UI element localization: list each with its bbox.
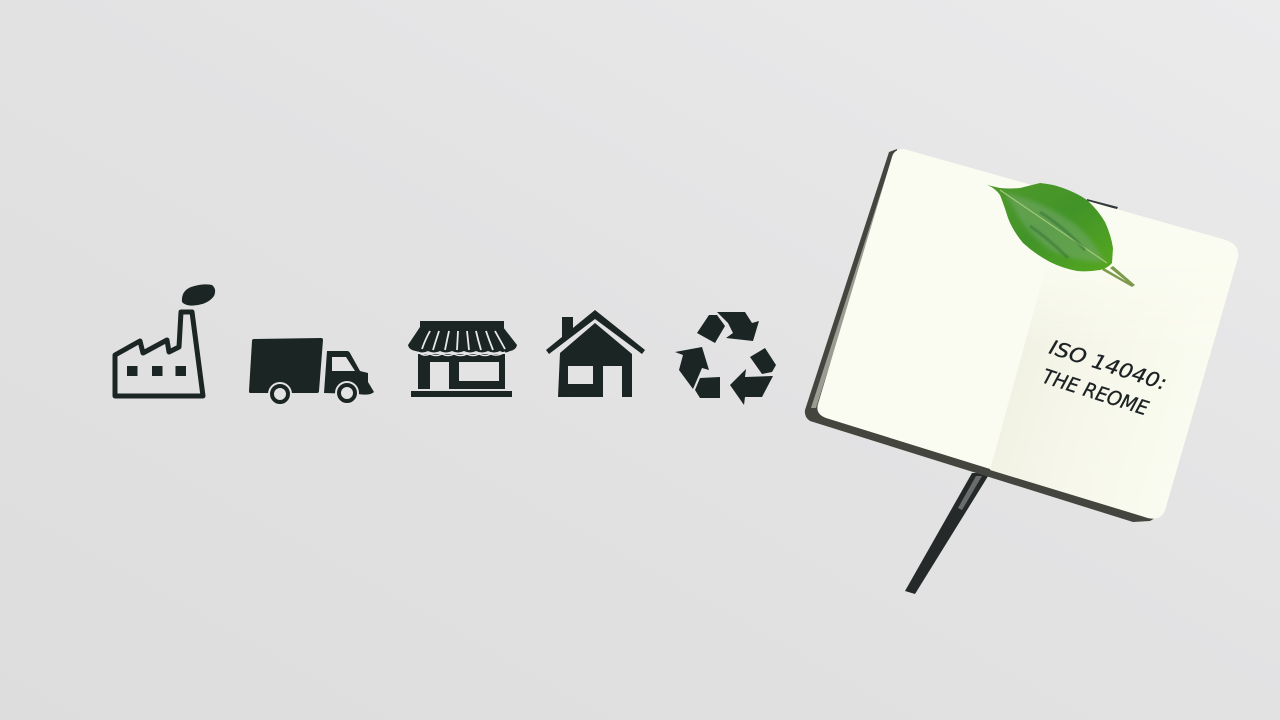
icon: delivery truck	[249, 338, 374, 406]
bookmark tip	[1087, 199, 1118, 209]
ribbon bookmark	[905, 473, 990, 594]
cover inner edge	[811, 152, 897, 408]
icon: house	[546, 310, 645, 397]
icon: storefront	[408, 321, 517, 397]
text: The Reome: THE REOME	[1039, 364, 1152, 420]
text: ISO 14040: ISO 14040:	[1046, 335, 1170, 395]
notebook pages	[817, 149, 1238, 519]
notebook	[805, 149, 1238, 594]
notebook cover	[805, 149, 1160, 522]
icon: factory	[115, 284, 215, 396]
leaf	[987, 183, 1135, 287]
icon: recycling arrows	[675, 312, 776, 405]
notebook handwriting	[1039, 335, 1170, 420]
